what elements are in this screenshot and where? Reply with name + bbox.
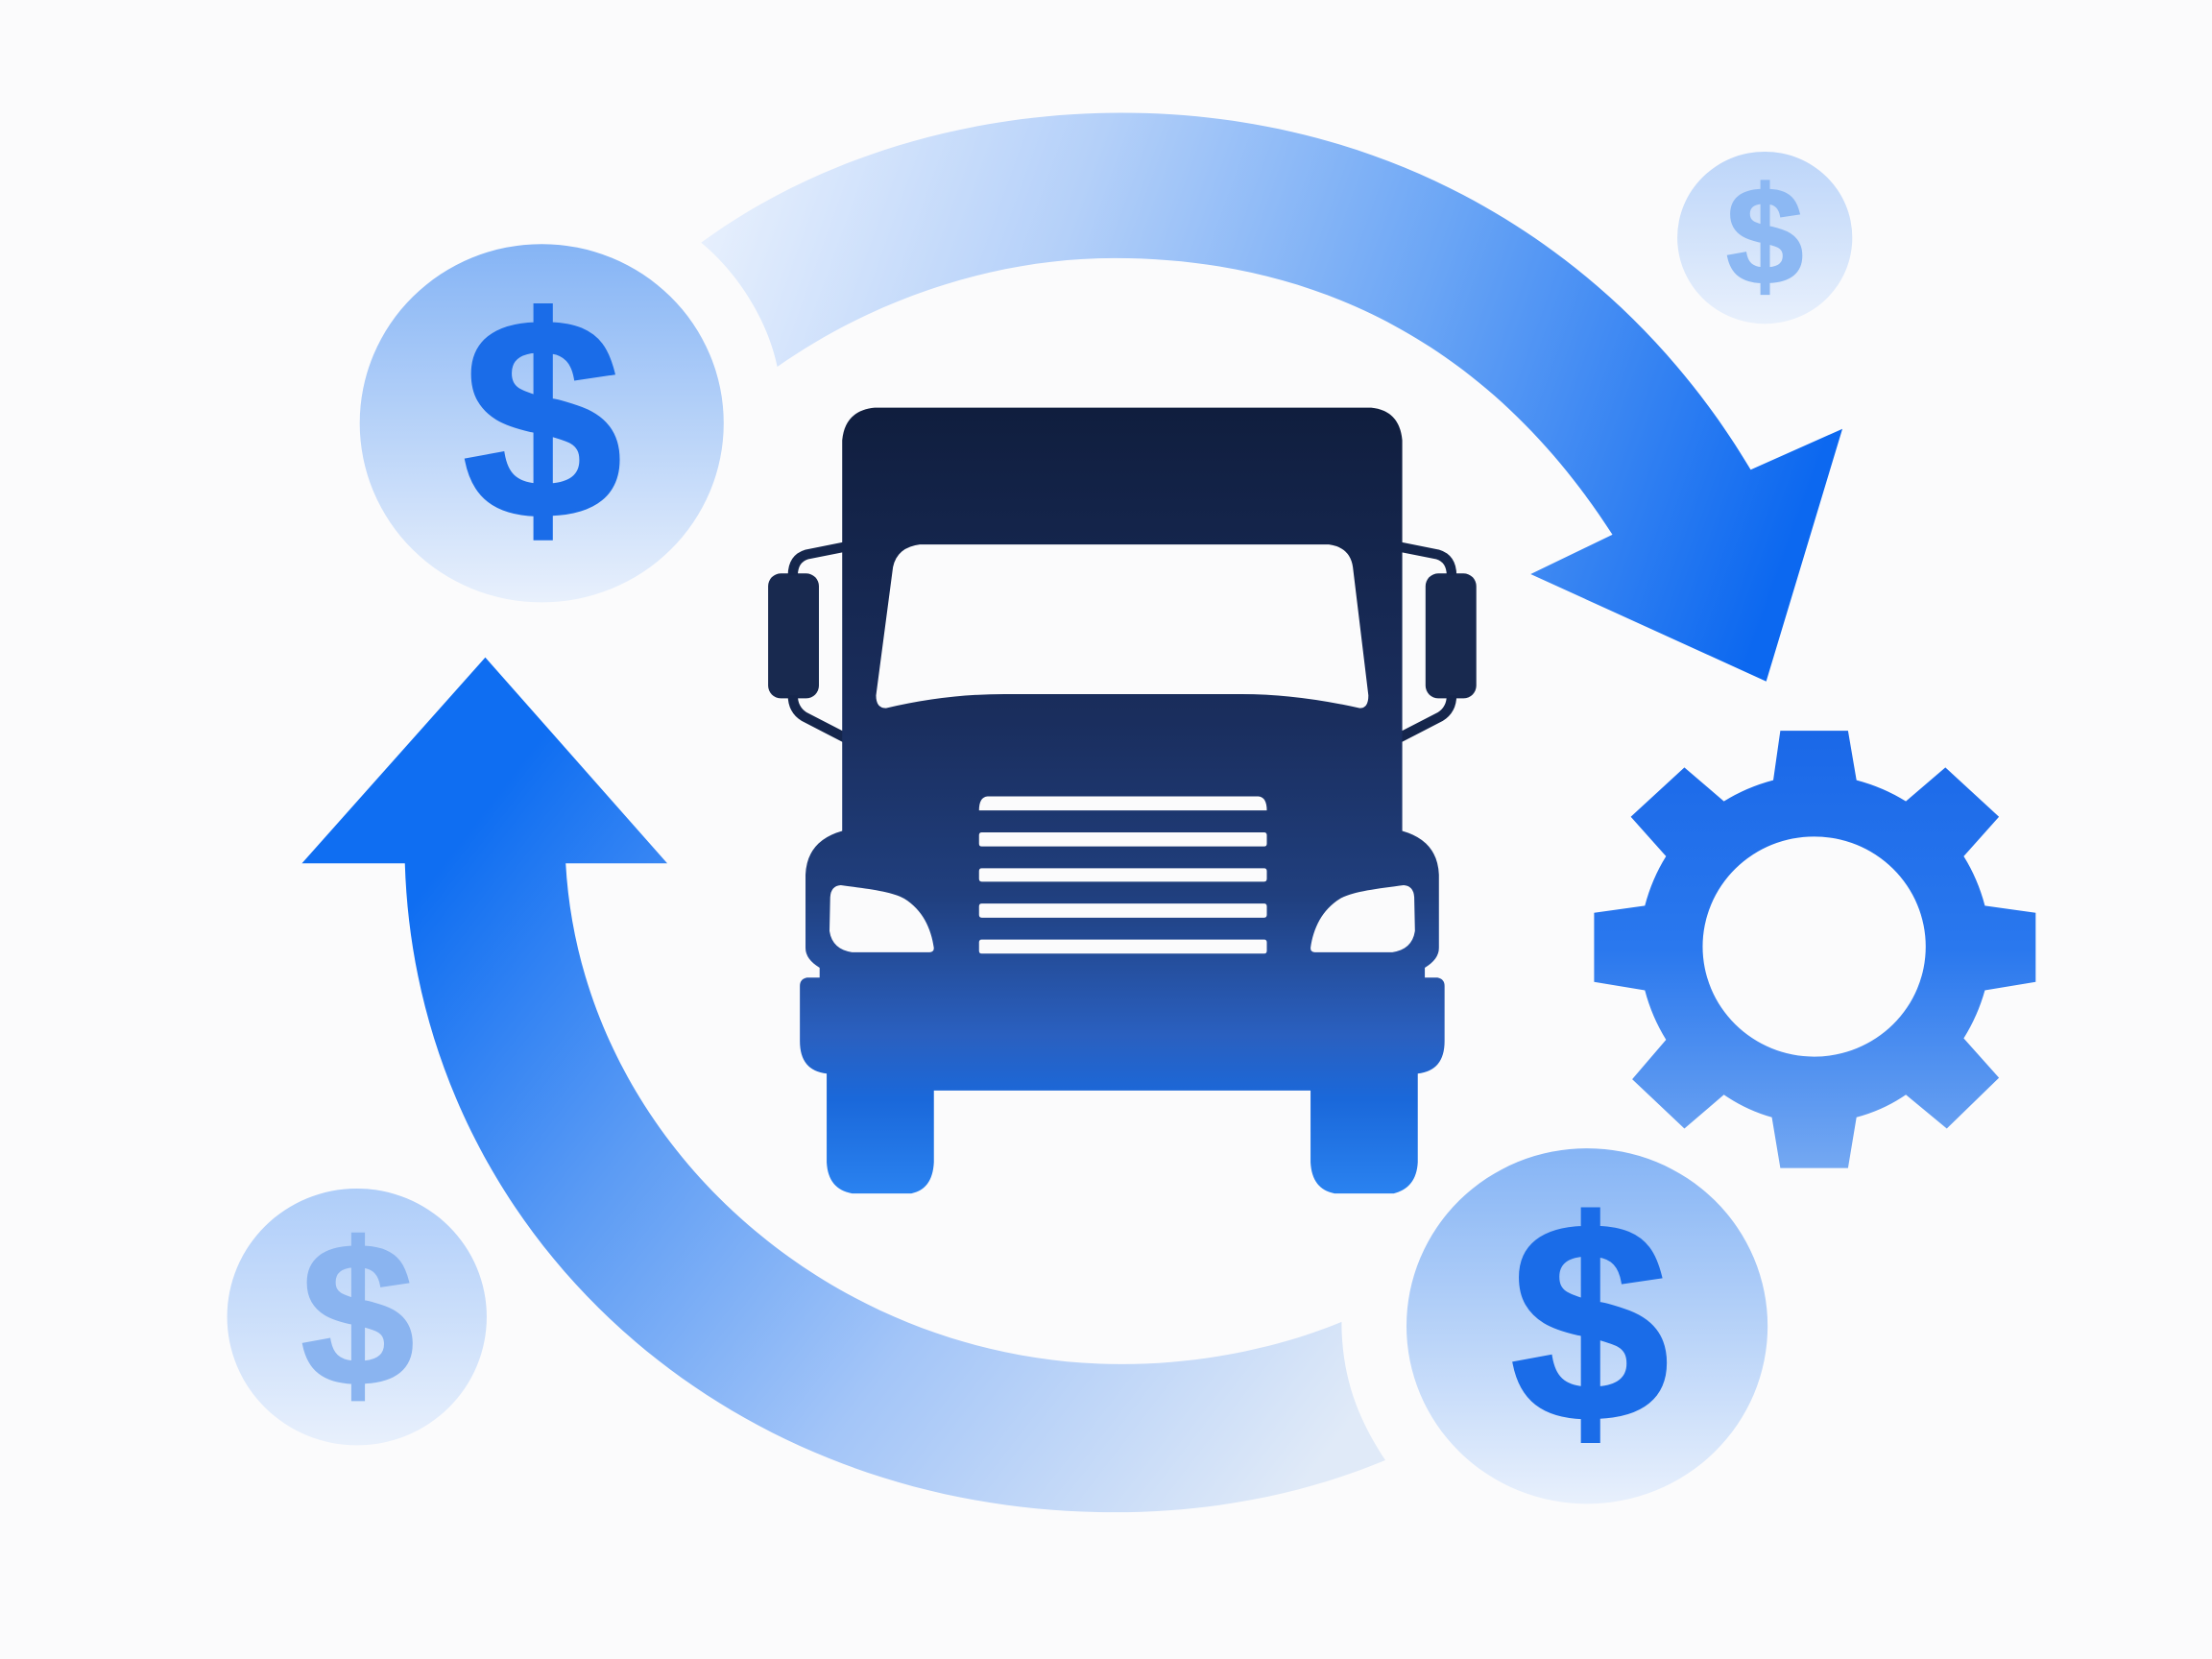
icon: large dollar coin bottom right <box>1407 1148 1767 1503</box>
icon: small dollar coin bottom left: $ <box>301 1200 414 1428</box>
icon: small dollar coin bottom left <box>228 1189 487 1445</box>
truck left mirror <box>768 546 850 740</box>
icon: small dollar coin top right: $ <box>1726 158 1803 313</box>
truck body silhouette <box>800 408 1445 1193</box>
icon: large dollar coin top left <box>360 244 724 602</box>
truck right mirror <box>1395 546 1477 740</box>
arrow: top curved arrow pointing to gear <box>701 113 1842 682</box>
icon: large dollar coin top left: $ <box>463 259 622 578</box>
arrow: bottom curved arrow pointing up to coin <box>301 658 1385 1512</box>
icon: truck front view <box>768 408 1477 1193</box>
icon: large dollar coin bottom right: $ <box>1511 1164 1669 1480</box>
icon: small dollar coin top right <box>1677 152 1852 324</box>
icon: gear <box>1594 731 2035 1168</box>
